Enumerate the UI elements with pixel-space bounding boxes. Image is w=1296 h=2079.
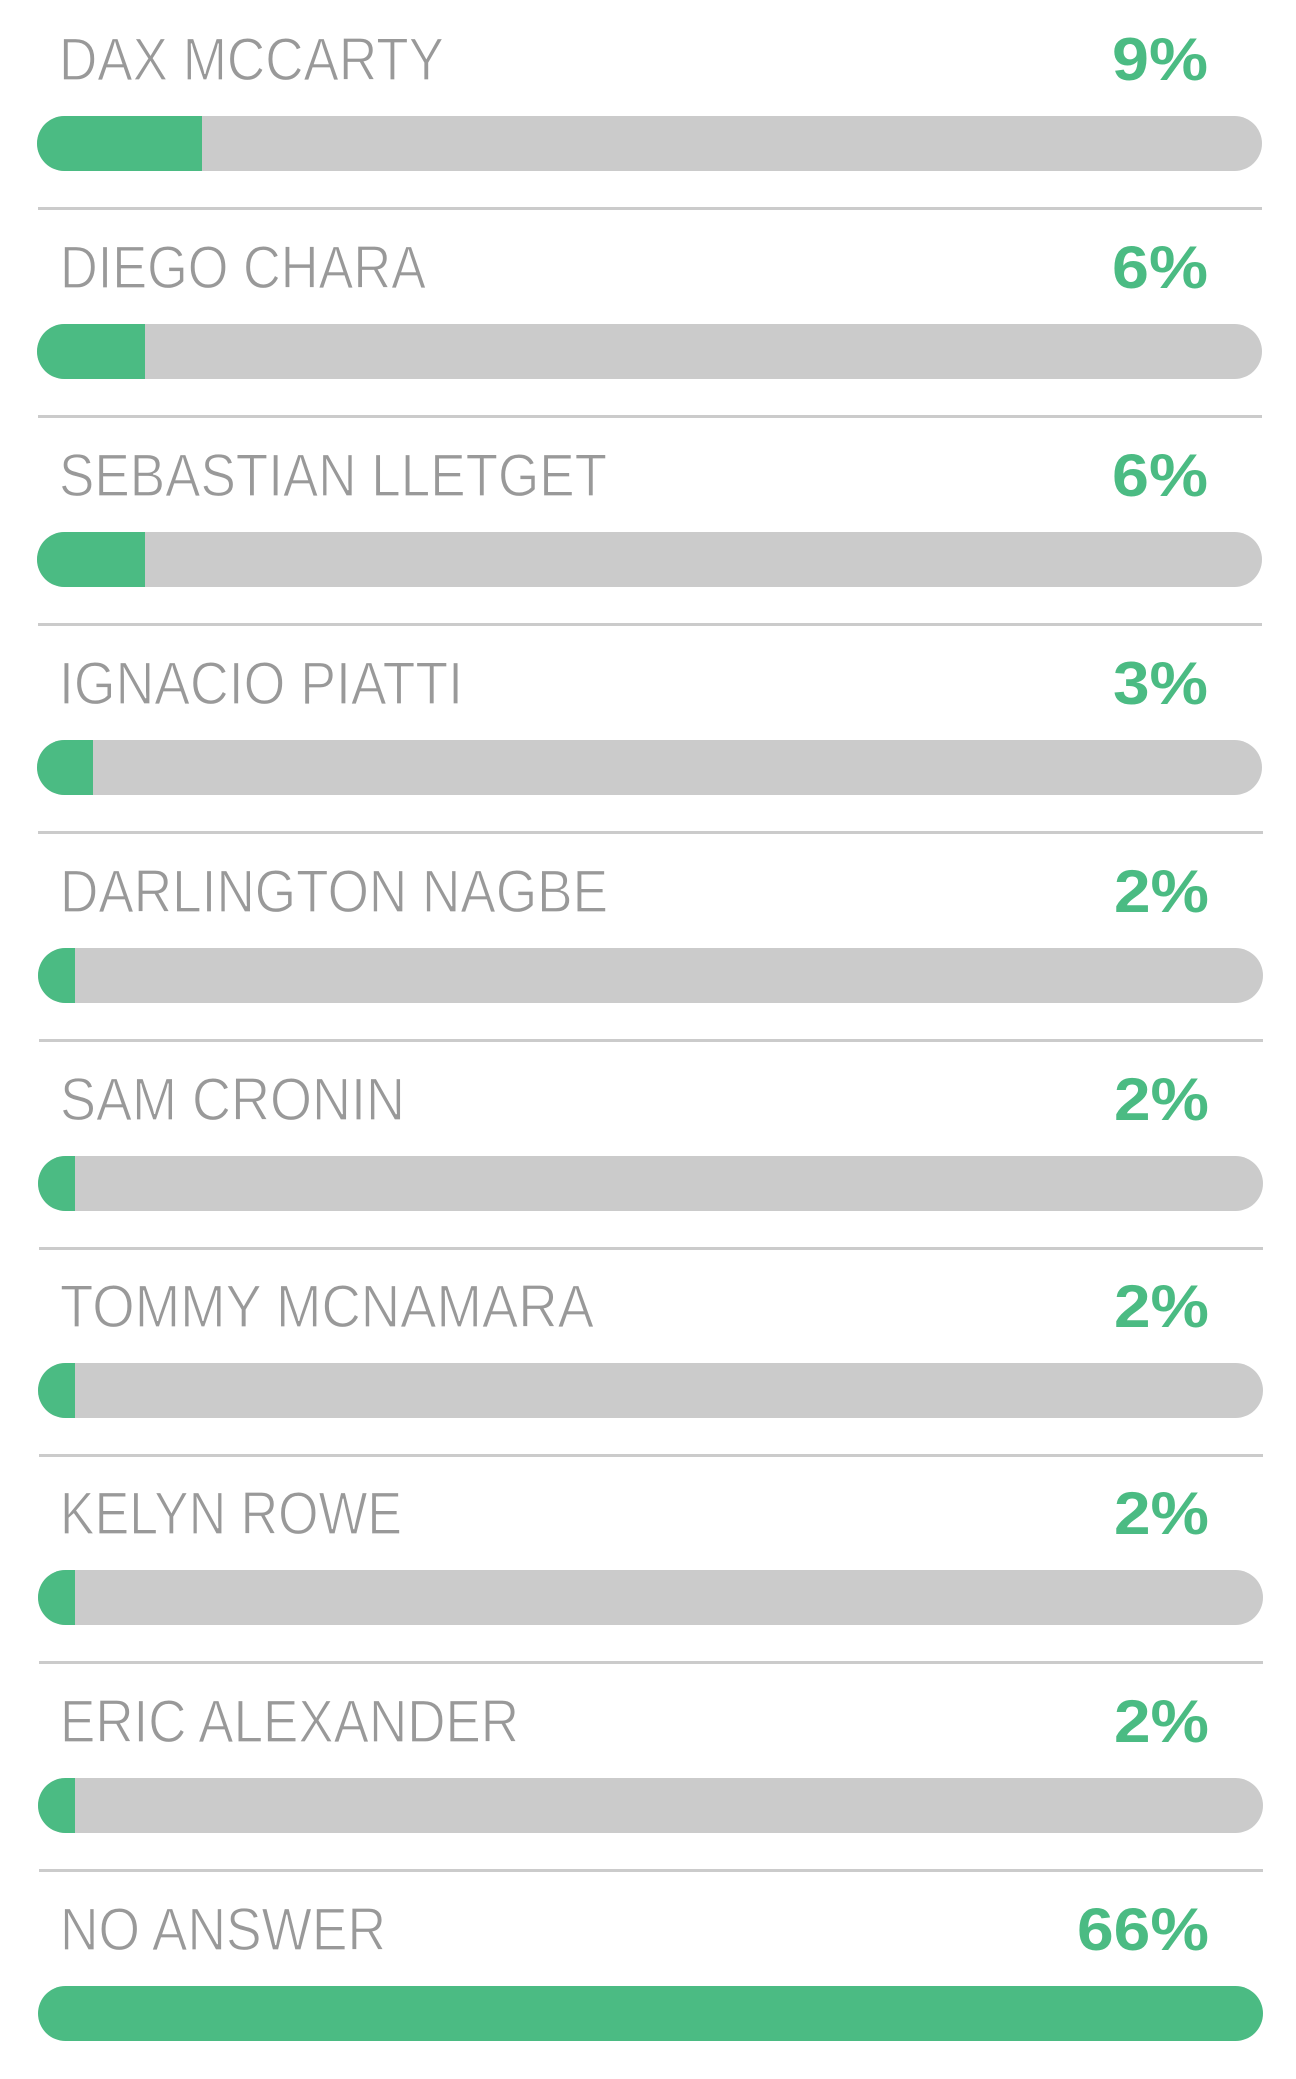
value: 2% <box>1114 1066 1209 1133</box>
value: 2% <box>1114 858 1209 925</box>
bar fill <box>37 532 145 587</box>
bar track <box>38 1363 1263 1418</box>
label: DAX MCCARTY <box>59 26 444 93</box>
row: Darlington Nagbe <box>38 858 1263 1003</box>
label: SAM CRONIN <box>60 1066 405 1133</box>
label: DIEGO CHARA <box>60 234 426 301</box>
bar fill <box>38 948 75 1003</box>
row: No Answer <box>38 1896 1263 2041</box>
bar fill <box>38 1156 75 1211</box>
bar fill <box>38 1986 1263 2041</box>
bar track <box>37 740 1262 795</box>
value: 2% <box>1114 1480 1209 1547</box>
bar track <box>38 1570 1263 1625</box>
label: TOMMY MCNAMARA <box>60 1273 594 1340</box>
row: Tommy McNamara <box>38 1273 1263 1418</box>
row: Sebastian Lletget <box>37 442 1262 587</box>
bar fill <box>37 324 145 379</box>
label: IGNACIO PIATTI <box>59 650 463 717</box>
value: 2% <box>1114 1273 1209 1340</box>
row: Diego Chara <box>37 234 1262 379</box>
bar track <box>38 1156 1263 1211</box>
value: 2% <box>1114 1688 1209 1755</box>
row: Kelyn Rowe <box>38 1480 1263 1625</box>
label: ERIC ALEXANDER <box>60 1688 519 1755</box>
bar fill <box>38 1570 75 1625</box>
bar fill <box>37 116 202 171</box>
label: KELYN ROWE <box>60 1480 402 1547</box>
row: Ignacio Piatti <box>37 650 1262 795</box>
value: 6% <box>1112 442 1208 509</box>
value: 3% <box>1113 650 1208 717</box>
bar fill <box>38 1363 75 1418</box>
bar track <box>37 116 1262 171</box>
bar track <box>38 1778 1263 1833</box>
label: NO ANSWER <box>60 1896 386 1963</box>
label: SEBASTIAN LLETGET <box>59 442 607 509</box>
label: DARLINGTON NAGBE <box>60 858 608 925</box>
value: 66% <box>1077 1896 1209 1963</box>
row: Dax McCarty <box>37 26 1262 171</box>
bar fill <box>38 1778 75 1833</box>
row: Eric Alexander <box>38 1688 1263 1833</box>
value: 6% <box>1112 234 1208 301</box>
bar track <box>37 324 1262 379</box>
bar track <box>38 948 1263 1003</box>
bar track <box>37 532 1262 587</box>
value: 9% <box>1112 26 1208 93</box>
bar fill <box>37 740 93 795</box>
row: Sam Cronin <box>38 1066 1263 1211</box>
